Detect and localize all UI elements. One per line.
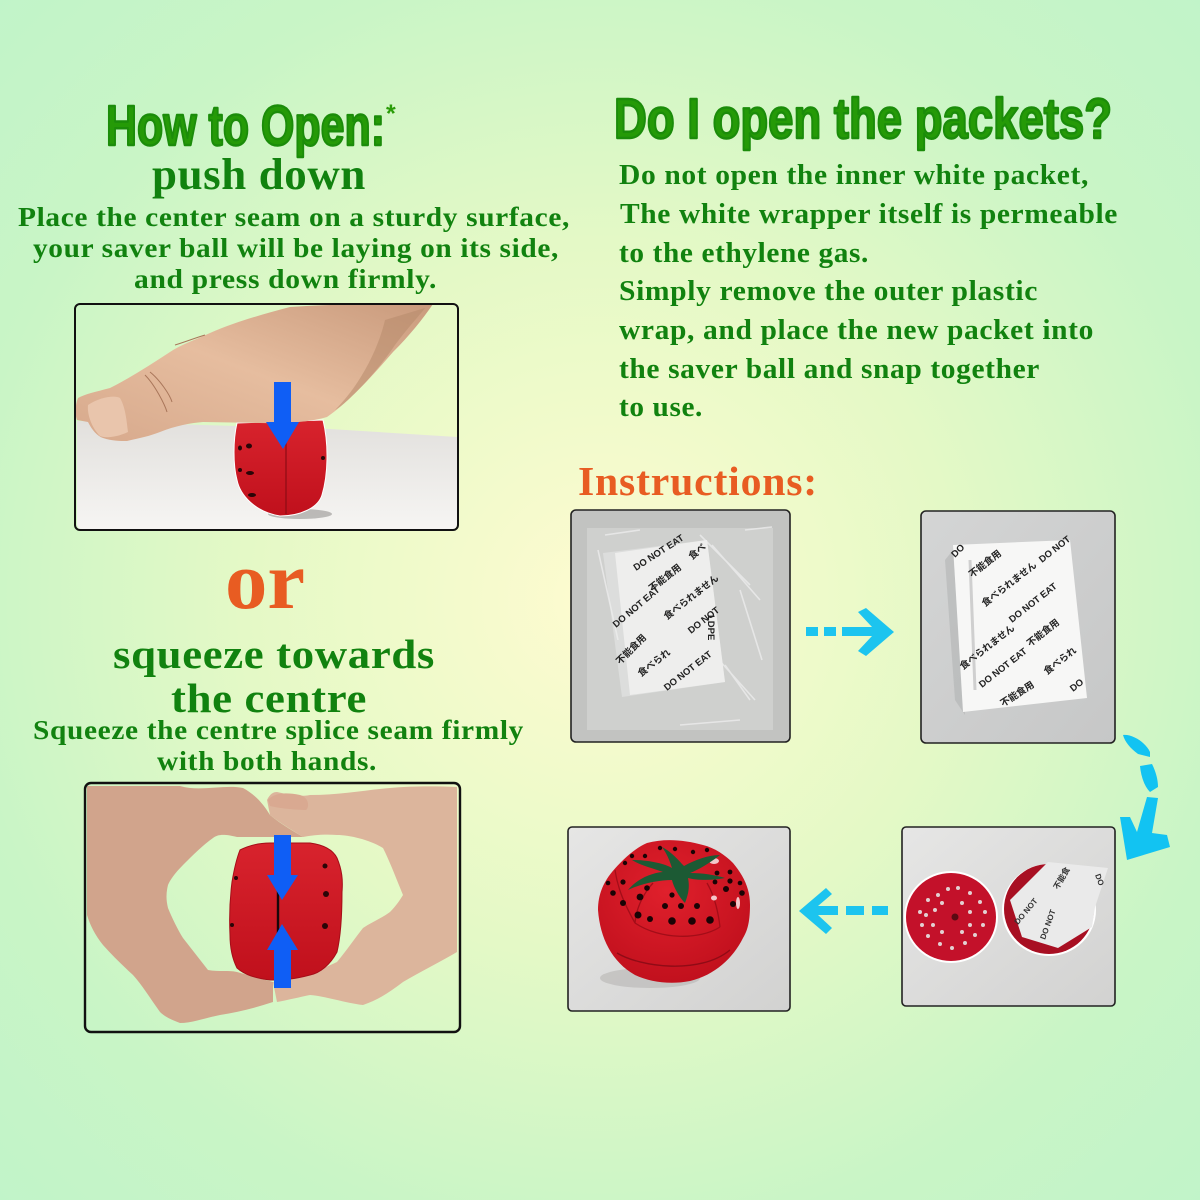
arrow: unwrapped to ball [1120,735,1170,860]
photo: wrapped packet: LDPE [705,615,716,640]
text: push down instructions: your saver ball will be laying on its side, [33,232,559,263]
arrow: packet to unwrapped [806,608,894,656]
photo: unwrapped packet: 不能食用 [966,548,1004,580]
subheading: squeeze towards the centre [113,631,435,721]
photo: wrapped packet: DO NOT [686,605,722,636]
text: squeeze instructions: with both hands. [157,745,377,776]
heading: instructions: Instructions: [578,458,818,504]
photo: unwrapped packet: 食べられません [957,622,1017,672]
subheading: squeeze towards the centre: the centre [171,675,367,721]
photo: unwrapped packet: 食べられません [979,559,1039,609]
photo: unwrapped packet: 不能食用 [998,679,1037,710]
photo: hand pressing ball [75,304,458,530]
text: or: or [225,535,305,626]
photo: unwrapped packet: 不能食用 [1024,617,1062,649]
frame [75,304,458,530]
text: push down instructions: and press down firmly. [134,263,437,294]
photo: hands squeezing ball [85,783,460,1032]
photo: wrapped packet: 食べられません [661,572,721,622]
photo: wrapped packet: 不能食用 [646,562,684,594]
photo: unwrapped packet: 食べられ [1041,644,1079,677]
heading: how to open: * [386,100,396,128]
text: packet explanation: to use. [619,392,703,423]
photo: opened ball with packet: DO NOT [1013,897,1040,926]
heading: how to open: How to Open: [106,94,385,158]
photo: wrapped packet [571,510,790,742]
photo: wrapped packet: DO NOT EAT [611,585,662,630]
text: packet explanation: Do not open the inner white packet, [619,160,1089,191]
text: packet explanation: to the ethylene gas. [619,238,869,269]
text: packet explanation: The white wrapper itself is permeable [620,199,1118,230]
text: push down instructions [18,201,570,294]
photo: unwrapped packet: DO NOT [1037,534,1073,565]
photo: unwrapped packet: DO NOT EAT [1007,581,1060,625]
photo: closed tomato ball [568,827,790,1011]
photo: unwrapped packet [921,511,1115,743]
photo: wrapped packet: DO NOT EAT [662,649,715,693]
photo: wrapped packet: 食べられ [635,646,673,679]
text: squeeze instructions: Squeeze the centre splice seam firmly [33,714,524,745]
frame [85,783,460,1032]
panel: do I open the packets [614,87,1118,423]
photo: opened ball with packet: 不能食 [1051,865,1072,891]
icon: blue down arrow [266,382,299,449]
photo: wrapped packet: 食べ [686,541,709,562]
photo: unwrapped packet: DO NOT EAT [977,646,1030,690]
text: packet explanation: the saver ball and snap together [619,354,1040,385]
text: packet explanation: Simply remove the outer plastic [619,276,1038,307]
photo: opened ball with packet: DO NOT [1038,908,1058,941]
photo: unwrapped packet: DO [1068,677,1086,694]
photo: wrapped packet: DO NOT EAT [632,533,686,574]
photo: wrapped packet: 不能食用 [614,632,649,667]
photo: opened ball with packet: DO [1093,873,1106,887]
text: push down instructions: Place the center seam on a sturdy surface, [18,201,570,232]
photo: opened ball with packet [902,827,1115,1006]
text: squeeze instructions [33,714,524,776]
arrow: ball assembly [799,888,888,934]
panel: squeeze [33,631,524,1032]
photo: unwrapped packet: DO [949,542,967,560]
text: packet explanation: wrap, and place the new packet into [619,315,1094,346]
text: packet explanation [619,160,1118,423]
subheading: squeeze towards the centre: squeeze towards [113,631,435,677]
icon: blue arrows [267,835,298,988]
subheading: push down: push down [152,150,366,199]
panel: how to open [18,94,570,530]
